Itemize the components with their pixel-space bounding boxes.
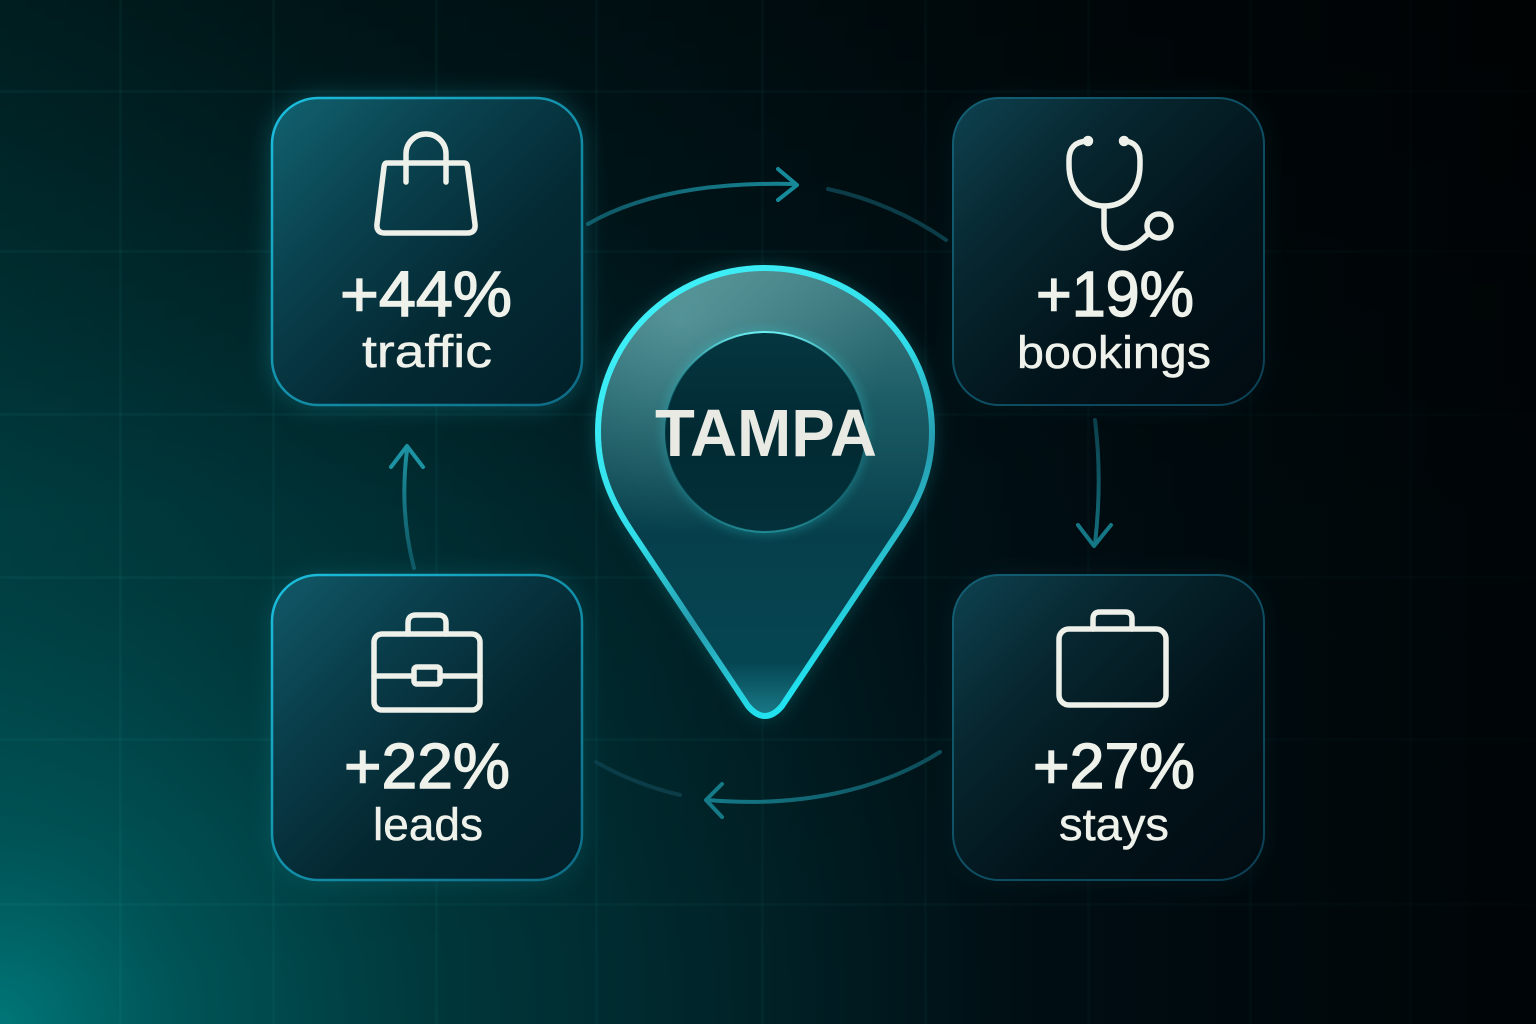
icon: suitcase — [1059, 612, 1166, 705]
pin inner circle — [662, 329, 868, 535]
stat: +27%: +27% — [1033, 730, 1195, 802]
connector arrow: stays to leads — [596, 752, 940, 817]
panel: stays — [953, 575, 1264, 880]
connector arrow: bookings to stays — [1078, 420, 1111, 546]
icon: shopping bag — [377, 134, 475, 233]
stat: +44%: +44% — [340, 258, 512, 330]
icon: stethoscope — [1069, 138, 1171, 248]
panel: leads — [272, 575, 582, 880]
panel: bookings — [953, 98, 1264, 405]
label: stays: stays — [1059, 799, 1169, 850]
stat: +22%: +22% — [344, 730, 510, 802]
label: bookings: bookings — [1017, 327, 1211, 378]
label: leads: leads — [373, 799, 483, 850]
label: TAMPA: TAMPA — [655, 396, 877, 471]
map pin — [598, 268, 932, 716]
stat: +19%: +19% — [1036, 258, 1194, 330]
label: traffic: traffic — [362, 326, 492, 377]
icon: briefcase with clasp — [374, 615, 480, 710]
connector arrow: traffic to bookings — [588, 169, 946, 240]
panel: traffic — [272, 98, 582, 405]
connector arrow: leads to traffic — [391, 446, 423, 568]
